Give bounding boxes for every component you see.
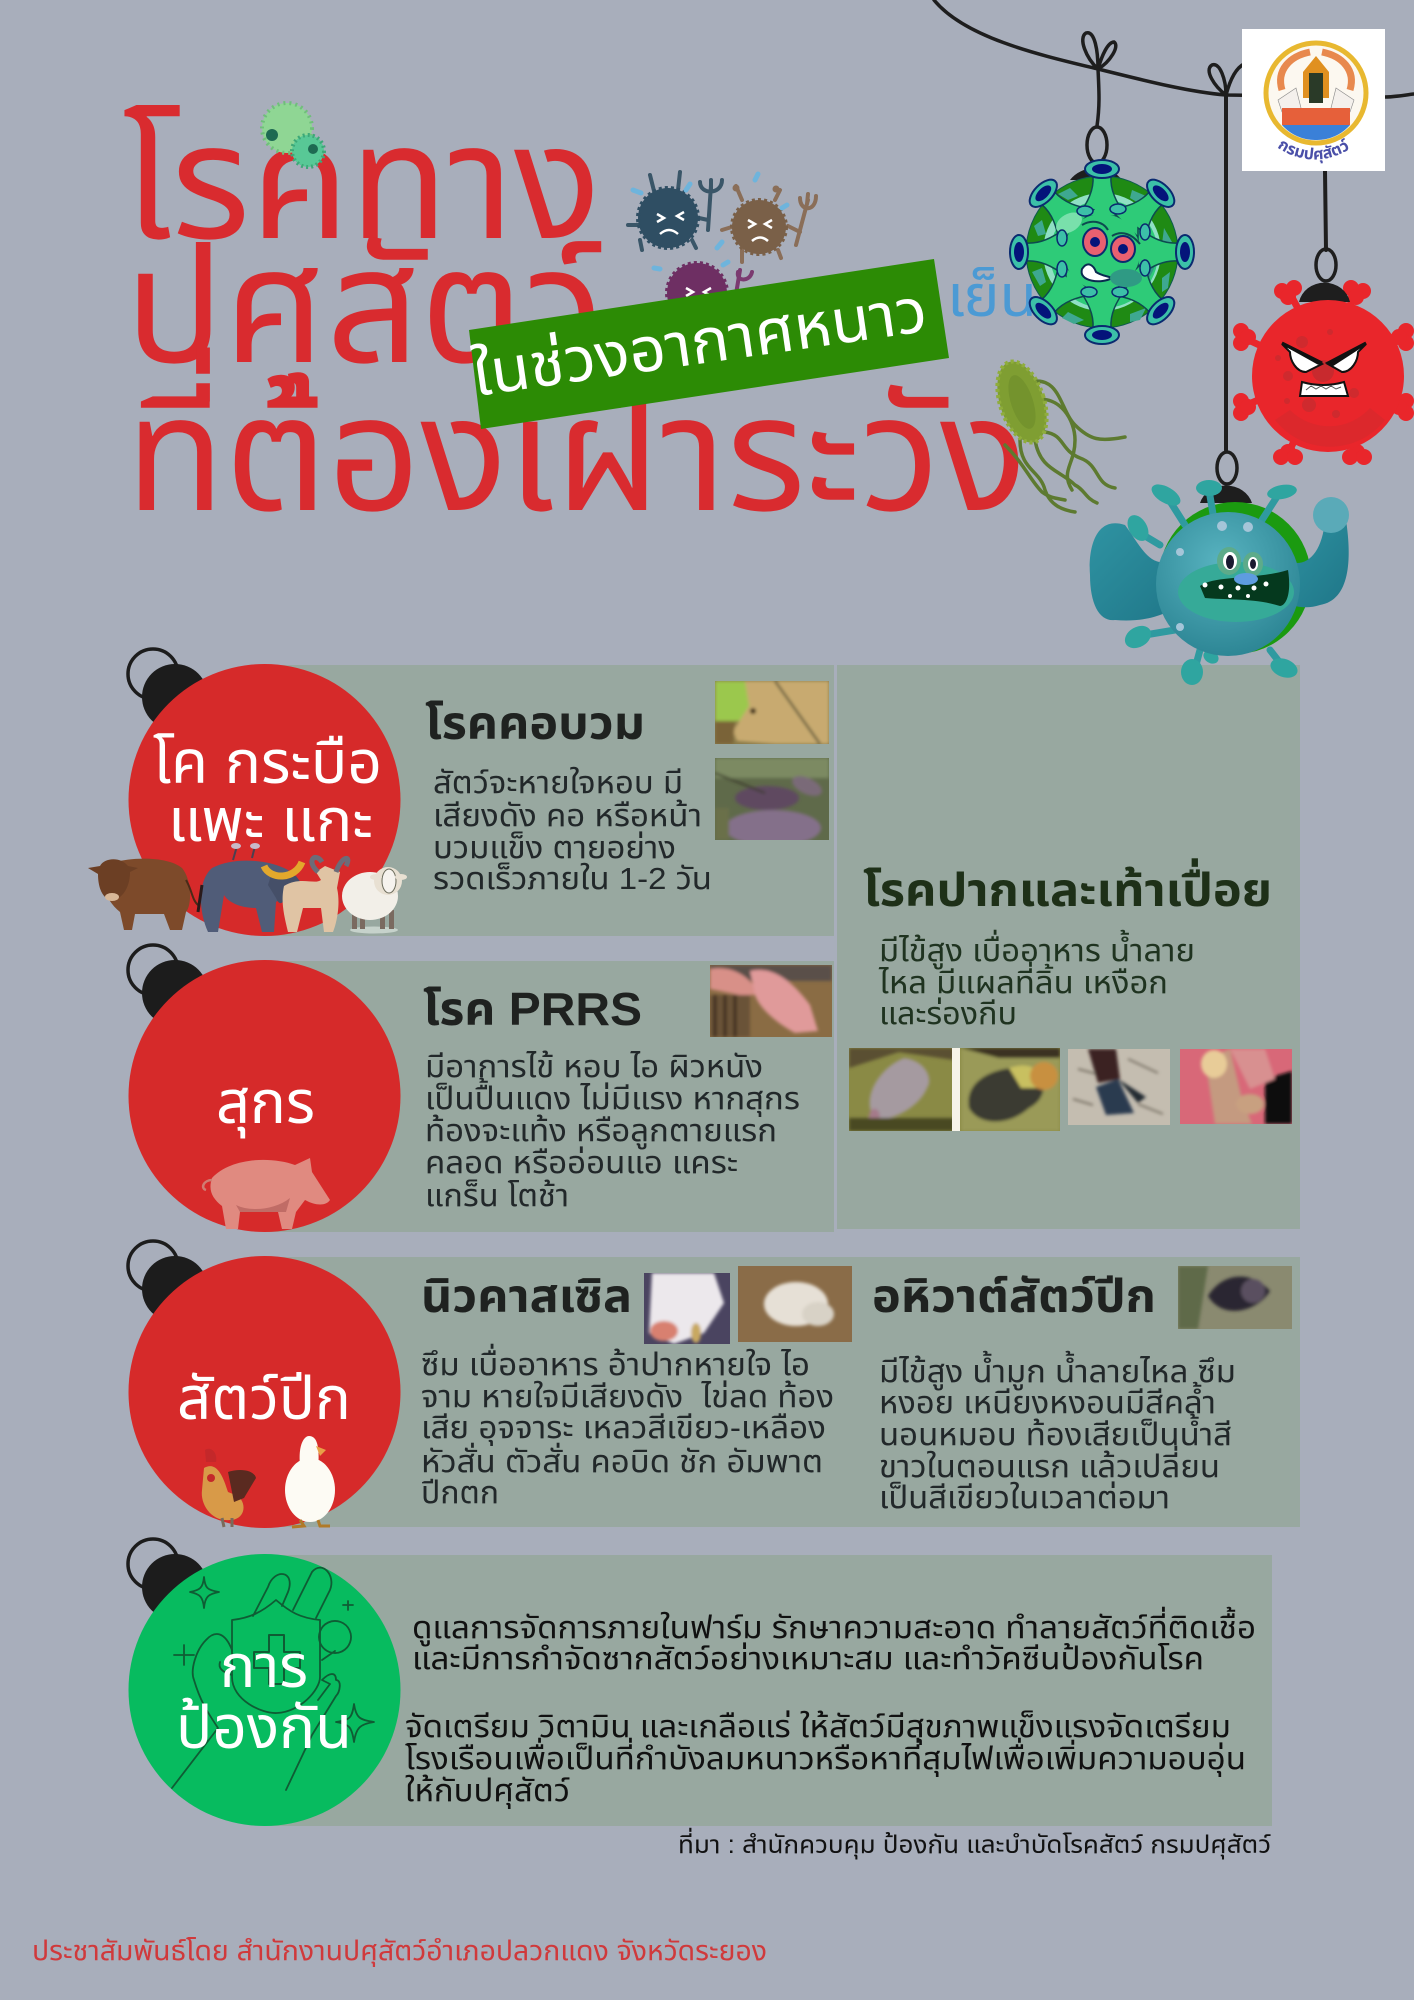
text: hemorrhagic septicemia symptoms: รวดเร็วภายใน 1-2 วัน [433,861,712,896]
photo: sick white chicken [644,1273,730,1344]
icon: green hanging virus [1010,160,1194,344]
icon: green germs on title [262,103,324,167]
circle: prevention category [128,1554,400,1826]
icon: rooster [202,1449,256,1527]
icon: goat [283,857,348,932]
icon: green bacterium [988,355,1125,512]
icon: pig [203,1158,330,1229]
text: hemorrhagic septicemia symptoms: บวมแข็ง ตายอย่าง [433,830,676,865]
heading: hemorrhagic septicemia: โรคคอบวม [425,697,645,749]
text: PRRS symptoms: เป็นปื้นแดง ไม่มีแรง หากสุกร [425,1077,800,1117]
text: Newcastle symptoms [421,1343,834,1510]
label: poultry category: สัตว์ปีก [177,1365,351,1432]
text: avian cholera symptoms: นอนหมอบ ท้องเสียเป็นน้ำสี [879,1413,1232,1452]
word: cold (blue): เย็น [947,264,1037,329]
circle: poultry category [128,1256,400,1528]
photo: swollen pink foot [1180,1049,1292,1124]
logo: department seal [1242,29,1385,171]
text: foot and mouth symptoms: ไหล มีแผลที่ลิ้น เหงือก [878,961,1168,1000]
icon: red hanging virus [1233,280,1414,465]
text: farm management advice: และมีการกำจัดซากสัตว์อย่างเหมาะสม และทำวัคซีนป้องกันโรค [412,1641,1204,1676]
text: avian cholera symptoms: หงอย เหนียงหงอนมีสีคล้ำ [879,1381,1216,1420]
title: โรคทาง [123,93,601,273]
icon: hand holding shield [172,1568,374,1790]
photo: hoof on cracked soil [1068,1049,1170,1125]
ornament: cap and ring [128,649,208,730]
text: avian cholera symptoms: มีไข้สูง น้ำมูก น้ำลายไหล ซึม [879,1350,1236,1390]
text: hemorrhagic septicemia symptoms [433,765,712,896]
title: ที่ต้องเฝ้าระวัง [126,347,1027,545]
panel: right - foot and mouth disease [837,665,1300,1229]
text: vitamin and housing advice: โรงเรือนเพื่อเป็นที่กำบังลมหนาวหรือหาที่สุมไฟเพื่อเพิ่มความอบอุ่น [405,1737,1246,1777]
text: hemorrhagic septicemia symptoms: เสียงดัง คอ หรือหน้า [433,798,702,833]
photo: dead white chicken [738,1266,852,1342]
photo: infected hooves pair [849,1048,1060,1131]
text: avian cholera symptoms: เป็นสีเขียวในเวลาต่อมา [879,1480,1170,1515]
hanging strings [934,0,1414,484]
heading: PRRS: โรค PRRS [423,983,642,1035]
text: farm management advice: ดูแลการจัดการภายในฟาร์ม รักษาความสะอาด ทำลายสัตว์ที่ติดเชื้อ [412,1606,1256,1646]
text: farm management advice [412,1606,1256,1676]
text: Newcastle symptoms: เสีย อุจจาระ เหลวสีเขียว-เหลือง [421,1410,826,1446]
photo: dead buffaloes [715,758,829,840]
text: Newcastle symptoms: ปีกตก [421,1475,499,1510]
logo: department seal: กรมปศุสัตว์ [1278,138,1348,164]
text: Newcastle symptoms: หัวสั่น ตัวสั่น คอบิด ชัก อัมพาต [421,1442,823,1479]
ornament: cap and ring [128,1241,208,1322]
panel: cattle, buffalo, goat, sheep [88,649,834,936]
label: cattle category [153,729,382,854]
text: foot and mouth symptoms [878,929,1195,1031]
text: PRRS symptoms: มีอาการไข้ หอบ ไอ ผิวหนัง [425,1049,763,1084]
panel: prevention [128,1539,1272,1826]
text: Newcastle symptoms: ซึม เบื่ออาหาร อ้าปากหายใจ ไอ [421,1343,810,1382]
text: avian cholera symptoms: ขาวในตอนแรก แล้วเปลี่ยน [879,1445,1220,1484]
heading: foot and mouth disease: โรคปากและเท้าเปื่อย [863,858,1272,916]
icon: three small scared germs [628,172,816,323]
circle: swine category [128,960,400,1232]
photo: sick pigs [710,965,832,1037]
label: prevention category: การ [220,1633,308,1700]
text: PRRS symptoms: ท้องจะแท้ง หรือลูกตายแรก [425,1113,777,1149]
icon: sheep [342,867,407,934]
banner: cold season: ในช่วงอากาศหนาว [468,276,931,410]
icon: buffalo [198,843,302,932]
label: prevention category [176,1633,352,1761]
text: vitamin and housing advice: ให้กับปศุสัตว์ [405,1773,570,1809]
panel: swine [128,945,834,1232]
ornament: cap and ring [128,1539,208,1620]
text: foot and mouth symptoms: มีไข้สูง เบื่ออาหาร น้ำลาย [879,929,1195,969]
text: foot and mouth symptoms: และร่องกีบ [879,996,1017,1031]
heading: Newcastle disease: นิวคาสเซิล [421,1270,632,1322]
text: vitamin and housing advice: จัดเตรียม วิตามิน และเกลือแร่ ให้สัตว์มีสุขภาพแข็งแรงจัดเตรียม [405,1709,1231,1745]
text: Newcastle symptoms: จาม หายใจมีเสียงดัง ไข่ลด ท้อง [421,1379,834,1414]
panel: poultry [128,1241,1300,1528]
heading: avian cholera: อหิวาต์สัตว์ปีก [872,1270,1156,1322]
title: ปศุสัตว์ [125,217,604,404]
icon: cow [88,859,198,930]
text: publisher footer: ประชาสัมพันธ์โดย สำนักงานปศุสัตว์อำเภอปลวกแดง จังหวัดระยอง [32,1935,767,1967]
text: PRRS symptoms: คลอด หรืออ่อนแอ แคระ [425,1145,738,1180]
text: PRRS symptoms [425,1049,800,1213]
label: swine category: สุกร [216,1069,315,1139]
text: PRRS symptoms: แกร็น โตช้า [425,1178,569,1213]
icon: teal muscular virus [1090,480,1349,685]
icon: duck [285,1436,335,1527]
text: hemorrhagic septicemia symptoms: สัตว์จะหายใจหอบ มี [433,765,683,800]
photo: dead birds [1178,1266,1292,1329]
label: prevention category: ป้องกัน [176,1694,352,1761]
text: source credit: ที่มา : สำนักควบคุม ป้องกัน และบำบัดโรคสัตว์ กรมปศุสัตว์ [678,1827,1271,1860]
ornament: cap and ring [128,945,208,1026]
photo: sick cow head [715,681,829,744]
label: cattle category: แพะ แกะ [168,787,373,854]
text: vitamin and housing advice [405,1709,1246,1809]
title [123,93,1027,545]
label: cattle category: โค กระบือ [153,729,382,796]
text: avian cholera symptoms [879,1350,1236,1515]
circle: cattle category [128,664,400,936]
